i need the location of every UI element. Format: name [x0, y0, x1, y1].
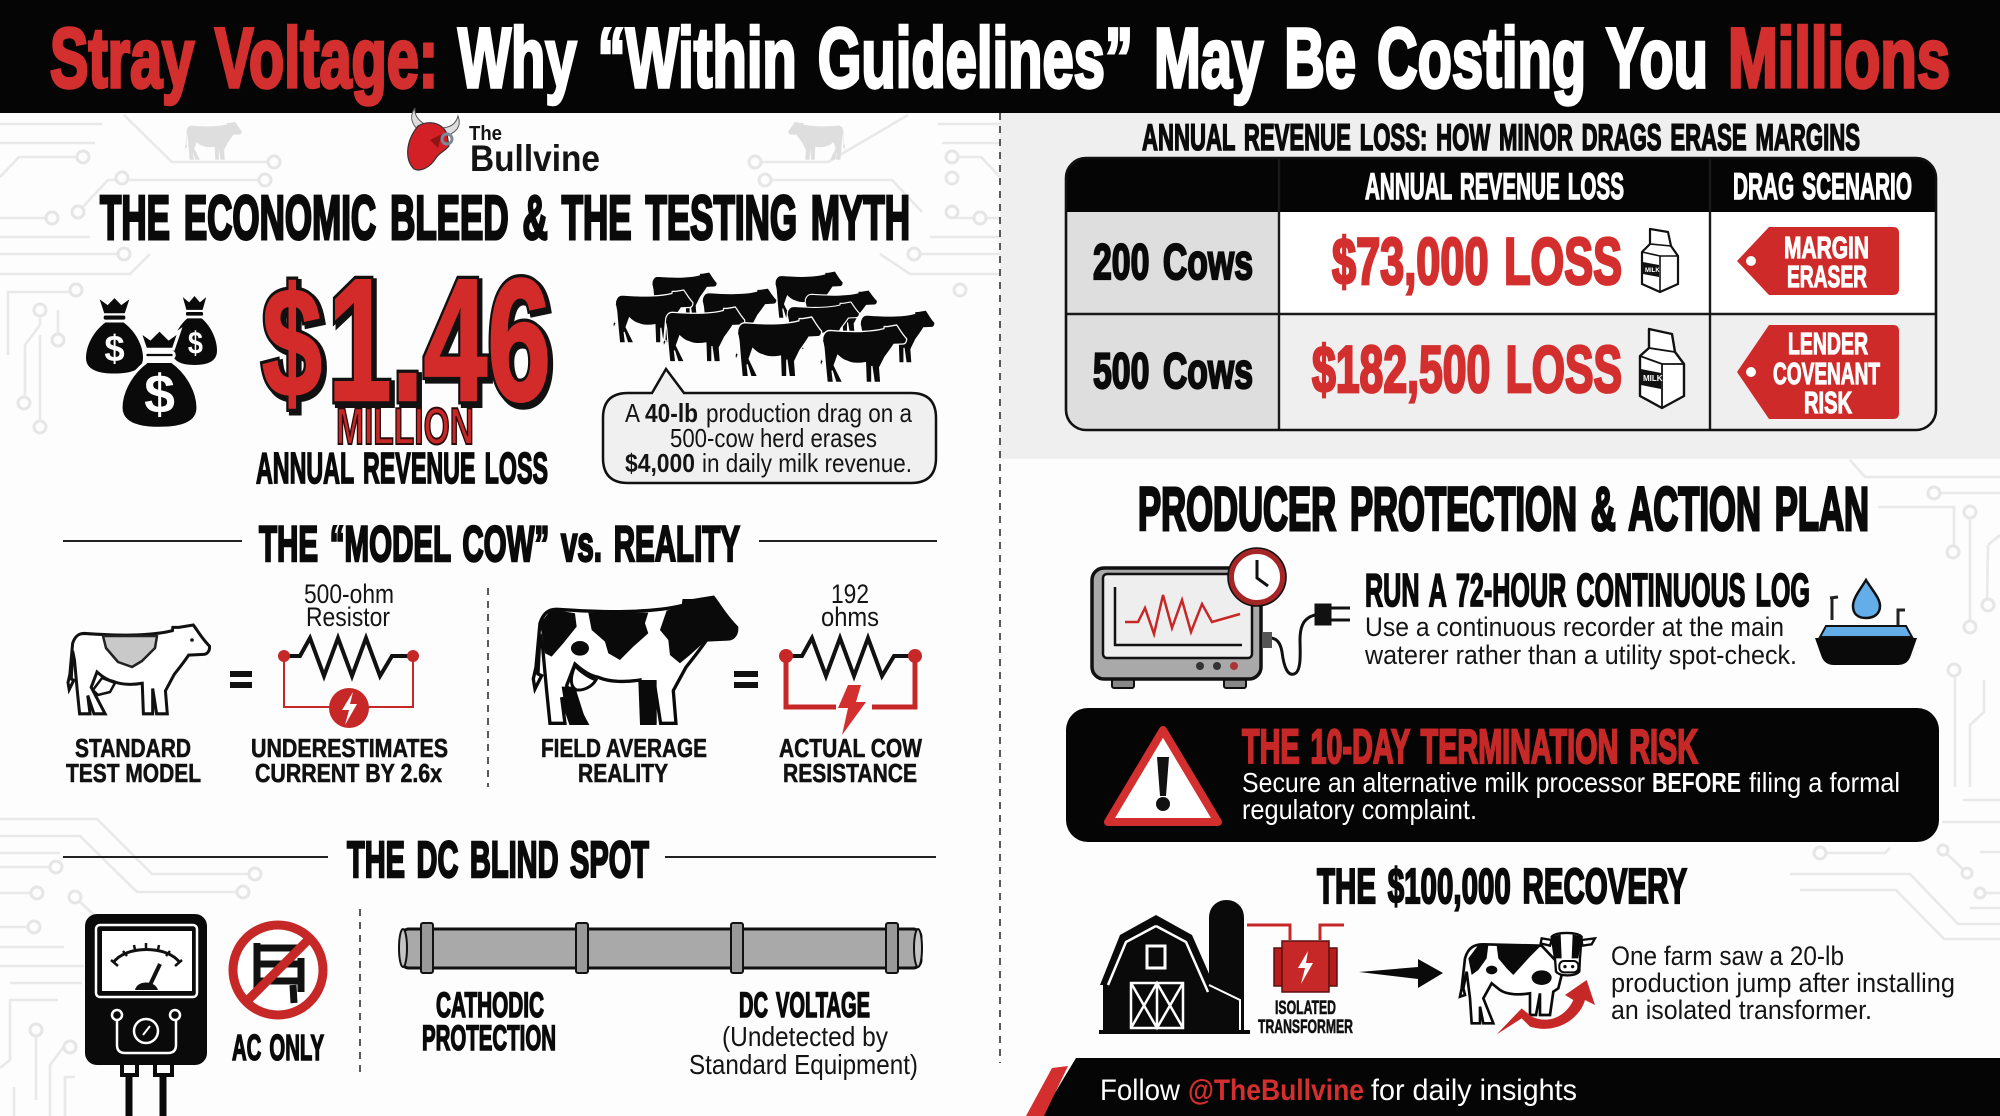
icon: water trough — [1815, 580, 1917, 665]
alert text line 1: Secure an alternative milk processor — [1242, 767, 1645, 798]
callout text line 2: 500-cow herd erases — [670, 423, 877, 453]
alert text line 2: regulatory complaint. — [1242, 794, 1477, 825]
tag: margin eraser: ERASER — [1787, 259, 1867, 294]
label: 500-ohm resistor: Resistor — [306, 602, 390, 632]
label: dc voltage: DC VOLTAGE — [739, 986, 870, 1025]
table header: annual revenue loss: ANNUAL REVENUE LOSS — [1365, 166, 1624, 207]
label: standard test model: STANDARD — [75, 733, 191, 763]
label: 500-ohm resistor — [304, 579, 394, 632]
value: 73,000 loss: $73,000 LOSS — [1332, 224, 1622, 298]
footer text: for daily insights — [1371, 1074, 1577, 1107]
stat value — [262, 242, 551, 437]
callout text line 3: in daily milk revenue. — [702, 448, 912, 478]
label: field average: REALITY — [578, 758, 668, 788]
big stat: 1.46 million — [256, 242, 554, 493]
icon: milk carton large — [1640, 329, 1684, 408]
stat outline: 1.46 — [328, 242, 551, 437]
background circuit pattern: upper right of left panel — [749, 115, 1000, 296]
heading: economic bleed: THE ECONOMIC BLEED & THE TESTING MYTH — [100, 184, 910, 253]
tag: margin eraser — [1737, 227, 1899, 295]
label: cathodic protection: CATHODIC — [436, 986, 544, 1025]
callout text line 1: production drag on a — [706, 398, 912, 428]
circuit: model resistor — [278, 638, 419, 728]
stat unit: MILLION — [336, 398, 474, 456]
tag: lender covenant risk — [1737, 325, 1899, 420]
stat outline: $ — [262, 256, 322, 429]
icon: no ac symbol — [233, 925, 323, 1015]
label: field average — [541, 733, 707, 788]
icon: money bags — [86, 296, 217, 428]
label: underestimates current: CURRENT BY 2.6x — [255, 758, 442, 788]
stat shadow — [265, 245, 554, 440]
icon: continuous recorder — [1092, 548, 1350, 688]
title: stray voltage: Stray Voltage: — [50, 11, 438, 105]
label: cathodic protection — [422, 986, 556, 1058]
icon: milk carton small: MILK — [1645, 268, 1660, 274]
action text: Use a continuous recorder at the main — [1365, 612, 1784, 642]
label: field average: FIELD AVERAGE — [541, 733, 707, 763]
icon: money bags: $ — [188, 325, 203, 361]
footer text — [1100, 1074, 1577, 1107]
icon: milk carton large: MILK — [1643, 374, 1663, 383]
row label: 200 cows: 200 Cows — [1093, 234, 1253, 290]
stat shadow: 1.46 — [331, 245, 554, 440]
equals sign — [230, 671, 252, 688]
circuit: actual resistance — [779, 638, 922, 735]
section: dc blind spot — [63, 831, 936, 1116]
footer bar — [1026, 1058, 2000, 1116]
logo wordmark: bullvine: Bullvine — [470, 138, 600, 179]
icon: warning triangle — [1108, 730, 1218, 822]
label: 192 ohms: 192 — [831, 579, 869, 609]
label: cathodic protection: PROTECTION — [422, 1019, 556, 1058]
label: standard test model: TEST MODEL — [66, 758, 201, 788]
label: dc voltage: Standard Equipment) — [689, 1049, 918, 1080]
label: standard test model — [66, 733, 201, 788]
callout: 40-lb drag — [603, 369, 936, 483]
callout text line 3 — [625, 448, 912, 478]
icon: ghost cow left — [185, 122, 242, 160]
icon: money bags: $ — [144, 363, 175, 425]
background circuit pattern: lower left — [0, 819, 261, 1116]
label: actual cow resistance — [779, 733, 922, 788]
alert text line 1: BEFORE — [1652, 767, 1741, 798]
alert text line 1 — [1242, 767, 1900, 798]
icon: standard test cow — [68, 625, 210, 714]
heading: recovery: THE $100,000 RECOVERY — [1317, 860, 1687, 914]
callout text line 1: 40-lb — [645, 398, 698, 428]
table: annual revenue loss — [1066, 158, 1936, 430]
tag: lender covenant risk: COVENANT — [1773, 356, 1880, 391]
tag: lender covenant risk: RISK — [1804, 385, 1852, 420]
text: recovery story — [1611, 941, 1955, 1025]
row label: 500 cows: 500 Cows — [1093, 343, 1253, 399]
label: underestimates current: UNDERESTIMATES — [251, 733, 448, 763]
logo: the bullvine — [408, 108, 600, 179]
icon: ghost cow right — [788, 122, 845, 160]
callout text line 1: A — [625, 398, 641, 428]
tag: margin eraser: MARGIN — [1784, 230, 1869, 265]
icon: money bags: $ — [104, 328, 125, 369]
action text — [1364, 612, 1797, 670]
heading: dc blind spot: THE DC BLIND SPOT — [347, 831, 649, 888]
label: isolated transformer: ISOLATED — [1275, 998, 1336, 1019]
icon: isolated transformer — [1247, 925, 1353, 1038]
callout text line 3: $4,000 — [625, 448, 695, 478]
footer text: Follow — [1100, 1074, 1180, 1107]
label: 192 ohms — [821, 579, 879, 632]
equals sign — [734, 671, 758, 688]
label: 500-ohm resistor: 500-ohm — [304, 579, 394, 609]
text: recovery story: an isolated transformer. — [1611, 995, 1872, 1025]
text: recovery story: One farm saw a 20-lb — [1611, 941, 1844, 971]
heading: model cow: THE “MODEL COW” vs. REALITY — [259, 516, 740, 572]
panel: revenue table background — [1000, 113, 2000, 459]
action text: waterer rather than a utility spot-check. — [1364, 640, 1797, 670]
alert text line 1: filing a formal — [1749, 767, 1900, 798]
column divider — [999, 113, 1001, 1063]
icon: bull head — [408, 108, 459, 170]
label: 192 ohms: ohms — [821, 602, 879, 632]
stat label: ANNUAL REVENUE LOSS — [256, 444, 548, 493]
stat value: $ — [262, 256, 322, 429]
text: recovery story: production jump after installing — [1611, 968, 1955, 998]
background circuit pattern: upper left — [0, 115, 280, 433]
value: 182,500 loss: $182,500 LOSS — [1312, 332, 1622, 406]
stat shadow: $ — [265, 259, 325, 432]
alert: 10-day termination risk — [1066, 708, 1939, 842]
icon: milk carton small — [1642, 229, 1678, 292]
alert heading: THE 10-DAY TERMINATION RISK — [1242, 721, 1698, 774]
arrow: transformer to cow — [1359, 959, 1443, 988]
label: underestimates current — [251, 733, 448, 788]
stat outline — [262, 242, 551, 437]
icon: holstein cow — [533, 597, 737, 723]
action: 72 hour log — [1364, 564, 1810, 670]
icon: cow herd — [613, 271, 935, 382]
background circuit pattern: right side — [1790, 460, 2000, 939]
label: dc voltage: (Undetected by — [722, 1021, 888, 1052]
icon: pipe — [399, 923, 922, 973]
label: actual cow resistance: RESISTANCE — [783, 758, 917, 788]
footer text: @TheBullvine — [1188, 1074, 1364, 1107]
section: model cow vs reality — [63, 516, 937, 788]
tag: lender covenant risk: LENDER — [1788, 326, 1868, 361]
icon: ac multimeter — [85, 914, 207, 1116]
logo wordmark: the: The — [469, 123, 502, 145]
stat value: 1.46 — [328, 242, 551, 437]
icon: barn and silo — [1099, 900, 1250, 1034]
title banner — [0, 0, 2000, 113]
icon: recovered cow with rising arrow — [1460, 933, 1595, 1034]
label: isolated transformer: TRANSFORMER — [1258, 1017, 1353, 1038]
callout text line 1 — [625, 398, 912, 428]
label: ac only: AC ONLY — [232, 1027, 324, 1068]
label: actual cow resistance: ACTUAL COW — [779, 733, 922, 763]
label: isolated transformer — [1258, 998, 1353, 1038]
label: dc voltage — [689, 986, 918, 1080]
